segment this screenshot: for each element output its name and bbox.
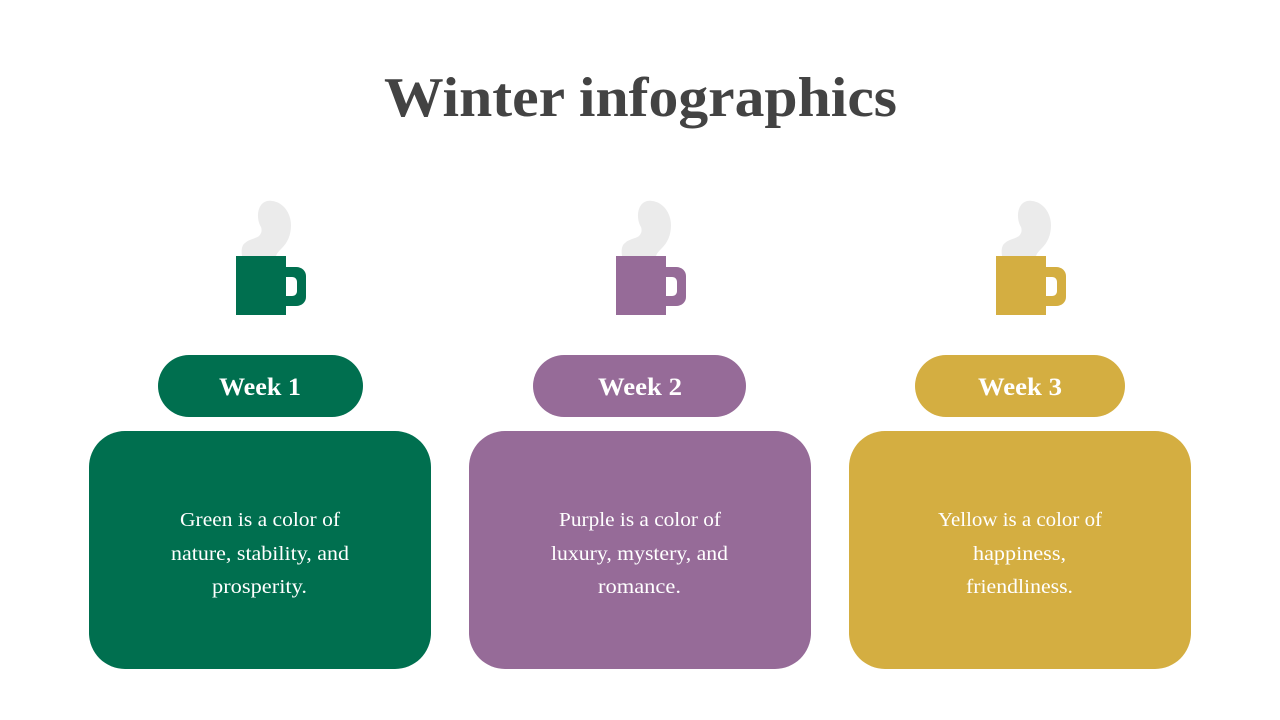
icon: green mug with steam [236,201,306,315]
card: green description: nature, stability, and [171,543,349,565]
pill: Week 1 [158,355,363,417]
card: purple description: luxury, mystery, and [551,543,728,565]
card: purple description: Purple is a color of [559,509,721,531]
card: yellow description: happiness, [973,543,1066,565]
title: Winter infographics [384,67,897,129]
card: purple description [469,431,811,669]
card: green description: prosperity. [212,576,307,598]
pill: Week 3 [915,355,1125,417]
card: green description [89,431,431,669]
pill: Week 2 [533,355,746,417]
icon: yellow mug with steam [996,201,1066,315]
pill: Week 2: Week 2 [598,374,682,401]
pill: Week 3: Week 3 [978,374,1062,401]
pill: Week 1: Week 1 [219,374,301,401]
column: week 1 [89,201,431,669]
column: week 3 [849,201,1191,669]
card: yellow description [849,431,1191,669]
icon: purple mug with steam [616,201,686,315]
card: yellow description: Yellow is a color of [938,509,1102,531]
card: yellow description: friendliness. [966,576,1073,598]
card: purple description: romance. [598,576,681,598]
column: week 2 [469,201,811,669]
card: green description: Green is a color of [180,509,340,531]
